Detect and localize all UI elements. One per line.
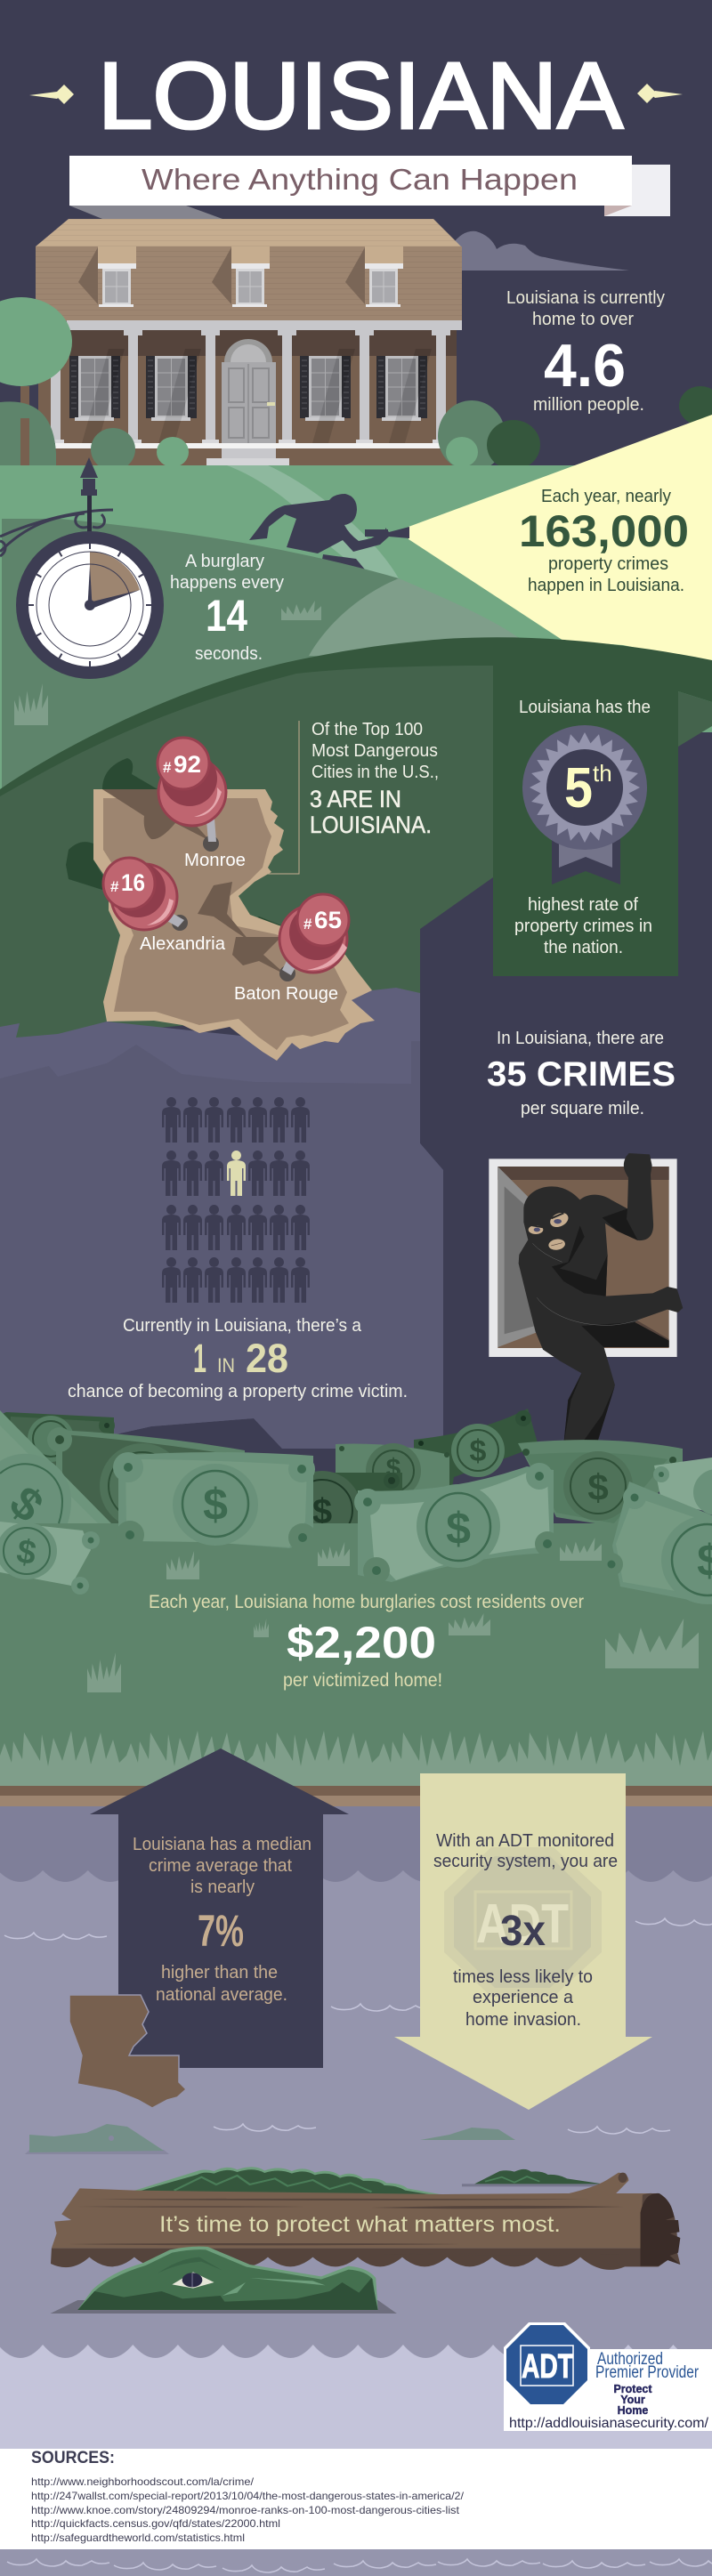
burglar climbing from window bbox=[489, 1153, 683, 1446]
stat: ADT 3x: 3x bbox=[500, 1908, 546, 1955]
alligator back on log bbox=[133, 2167, 443, 2195]
stat: cost of burglaries: Each year, Louisiana home burglaries cost residents over bbox=[149, 1592, 584, 1612]
money ground bbox=[0, 1523, 712, 1737]
left edge light stripe bbox=[0, 641, 2, 792]
icon: left title ornament bbox=[29, 85, 74, 104]
sources panel: http://safeguardtheworld.com/statistics.html bbox=[31, 2532, 245, 2544]
money: rotated left bill: $ bbox=[0, 1476, 53, 1532]
stat: crimes per square mile: In Louisiana, there are bbox=[497, 1029, 664, 1048]
map of Louisiana bbox=[93, 789, 375, 1061]
swamp water bbox=[0, 1806, 712, 2449]
faint background alligator hump bbox=[420, 2128, 515, 2140]
pin: Baton Rouge #65: # bbox=[303, 916, 312, 933]
people pictogram grid bbox=[162, 1097, 310, 1303]
subtitle ribbon bbox=[69, 156, 670, 219]
up arrow panel bbox=[90, 1748, 349, 2068]
down arrow panel bbox=[394, 1773, 652, 2110]
stat: 5th highest rate text: property crimes in bbox=[514, 917, 652, 936]
cloud bbox=[452, 231, 629, 271]
money: far right back bill: $ bbox=[470, 1434, 487, 1468]
log with alligators bbox=[51, 2167, 680, 2314]
city labels: Monroe bbox=[184, 851, 246, 870]
money: front right-center bill: $ bbox=[446, 1504, 471, 1554]
city labels bbox=[140, 851, 338, 1004]
stat: property crimes in beam: happen in Louisiana. bbox=[528, 576, 684, 595]
stat: property crimes in beam bbox=[519, 487, 689, 595]
stat: burglary frequency: A burglary bbox=[185, 552, 264, 571]
stat: property crimes in beam: Each year, nearly bbox=[541, 487, 671, 506]
stat: population: million people. bbox=[533, 395, 644, 415]
pin: Monroe #92: # bbox=[163, 759, 172, 776]
clock bbox=[16, 531, 164, 679]
stat: population: Louisiana is currently bbox=[506, 288, 665, 308]
stat: property crimes in beam: property crimes bbox=[548, 554, 668, 574]
stat: top 100 dangerous cities bbox=[310, 720, 439, 838]
medal: 5th bbox=[522, 725, 647, 884]
money: lower left bill bbox=[0, 1522, 100, 1595]
grass tuft bbox=[281, 601, 321, 620]
stat: 1 in 28: Currently in Louisiana, there’s a bbox=[123, 1316, 362, 1336]
stat: 5th highest rate text: highest rate of bbox=[528, 895, 638, 915]
grass tuft bbox=[14, 683, 48, 725]
medal: 5th: 5 bbox=[564, 755, 593, 820]
stat: cost of burglaries: $2,200 bbox=[287, 1618, 436, 1668]
bottom water strip bbox=[0, 2549, 712, 2576]
stat: ADT 3x: experience a bbox=[473, 1988, 574, 2007]
sources panel: http://247wallst.com/special-report/2013/10/04/the-most-dangerous-states-in-america/2/ bbox=[31, 2490, 465, 2502]
slogan on log: It’s time to protect what matters most. bbox=[159, 2212, 561, 2237]
stat: top 100 dangerous cities: Of the Top 100 bbox=[312, 720, 423, 739]
money: far right back bill bbox=[414, 1409, 538, 1530]
path highlight bbox=[227, 465, 400, 580]
stat: 1 in 28: IN bbox=[217, 1354, 235, 1377]
stat: median crime average: crime average that bbox=[149, 1856, 292, 1876]
stat: burglary frequency: 14 bbox=[206, 591, 247, 641]
stat: ADT 3x: security system, you are bbox=[433, 1852, 618, 1871]
right green sliver bbox=[678, 691, 712, 747]
stat: top 100 dangerous cities: LOUISIANA. bbox=[310, 812, 432, 838]
stat: median crime average: higher than the bbox=[161, 1963, 278, 1982]
title: LOUISIANA bbox=[98, 44, 623, 149]
faded ADT badge bbox=[444, 1847, 602, 1997]
stat: crimes per square mile: 35 CRIMES bbox=[487, 1055, 676, 1094]
stat: top 100 dangerous cities: 3 ARE IN bbox=[310, 786, 401, 812]
small alligator back bbox=[462, 2169, 603, 2186]
money: right mid bill bbox=[518, 1440, 683, 1528]
money: rotated left bill bbox=[0, 1410, 111, 1532]
stat: ADT 3x: times less likely to bbox=[453, 1967, 593, 1987]
flashlight beam bbox=[409, 415, 712, 663]
ADT authorized provider block: Home bbox=[618, 2404, 648, 2417]
money: front right-center bill bbox=[354, 1463, 560, 1584]
stat: 5th highest rate text bbox=[514, 698, 652, 957]
money: front center bill: $ bbox=[203, 1480, 228, 1530]
money: right mid bill: $ bbox=[587, 1466, 609, 1508]
stat: cost of burglaries: per victimized home! bbox=[283, 1670, 442, 1691]
stat: population: 4.6 bbox=[544, 332, 626, 400]
stat: crimes per square mile bbox=[487, 1029, 676, 1118]
tall grass band bbox=[0, 1729, 712, 1786]
pin: Baton Rouge #65 bbox=[279, 894, 349, 981]
pin: Baton Rouge #65: 65 bbox=[314, 907, 342, 933]
subtitle ribbon: Where Anything Can Happen bbox=[142, 163, 578, 196]
stat: population: home to over bbox=[532, 310, 634, 329]
ADT authorized provider block: Protect bbox=[613, 2383, 652, 2395]
stat: median crime average: 7% bbox=[198, 1906, 244, 1956]
sources panel: http://quickfacts.census.gov/qfd/states/22000.html bbox=[31, 2517, 280, 2530]
sources panel bbox=[0, 2449, 712, 2549]
stat: ADT 3x: home invasion. bbox=[465, 2010, 581, 2030]
money: back left bill bbox=[0, 1412, 115, 1530]
stat: 1 in 28 bbox=[68, 1316, 408, 1401]
stat: median crime average: national average. bbox=[156, 1985, 287, 2005]
stat: ADT 3x bbox=[433, 1831, 618, 2030]
map pin shadows on field bbox=[66, 758, 281, 925]
stat: property crimes in beam: 163,000 bbox=[519, 506, 689, 556]
purple mountain field bbox=[0, 988, 443, 1459]
stat: 1 in 28: 1 bbox=[193, 1336, 206, 1381]
stat: burglary frequency: seconds. bbox=[195, 644, 263, 664]
wave ripples bbox=[4, 1918, 712, 2134]
money: front right bill bbox=[600, 1482, 712, 1604]
pin: Monroe #92 bbox=[158, 738, 226, 852]
pin: Alexandria #16: # bbox=[110, 878, 119, 895]
money: dark middle bill: $ bbox=[312, 1492, 332, 1531]
stat: population bbox=[506, 288, 665, 415]
stat: 1 in 28: 28 bbox=[246, 1336, 288, 1381]
money: middle bill bbox=[336, 1443, 449, 1530]
stat: ADT 3x: With an ADT monitored bbox=[436, 1831, 614, 1851]
money: lower left bill: $ bbox=[14, 1532, 39, 1572]
house bbox=[36, 219, 462, 465]
hillside ground bbox=[0, 465, 712, 732]
money: dark bill bbox=[47, 1427, 245, 1530]
stat: burglary frequency: happens every bbox=[170, 573, 284, 593]
icon: burglar with flashlight silhouette bbox=[249, 494, 409, 569]
stat: crimes per square mile: per square mile. bbox=[521, 1099, 644, 1118]
sources panel: http://www.neighborhoodscout.com/la/crime/ bbox=[31, 2475, 255, 2488]
stat: burglary frequency bbox=[170, 552, 284, 664]
light hill patch bbox=[309, 578, 534, 663]
stat: median crime average bbox=[133, 1835, 312, 2005]
ADT authorized provider block: http://addlouisianasecurity.com/ bbox=[509, 2416, 709, 2431]
money: front center bill bbox=[113, 1452, 317, 1552]
stat: top 100 dangerous cities: Cities in the U.S., bbox=[312, 763, 439, 782]
faint background alligator bbox=[25, 2124, 169, 2154]
sources panel: http://www.knoe.com/story/24809294/monroe-ranks-on-100-most-dangerous-cities-list bbox=[31, 2504, 460, 2516]
pin: Alexandria #16 bbox=[103, 858, 188, 931]
dark green hill and stat panel bbox=[0, 637, 712, 976]
stat: 1 in 28: chance of becoming a property crime victim. bbox=[68, 1382, 408, 1401]
ADT authorized provider block: Authorized bbox=[597, 2350, 663, 2369]
grass tufts on money field bbox=[87, 1538, 699, 1692]
ADT authorized provider block: Your bbox=[620, 2394, 645, 2406]
lamp post and scroll arms bbox=[0, 457, 113, 556]
stat: median crime average: is nearly bbox=[190, 1877, 255, 1897]
ADT authorized provider block: ADT bbox=[522, 2348, 573, 2386]
medal: 5th: th bbox=[593, 760, 612, 787]
stat: top 100 dangerous cities: Most Dangerous bbox=[312, 741, 438, 761]
alligator head bbox=[51, 2247, 397, 2314]
mid green map field bbox=[0, 666, 493, 1041]
icon: right title ornament bbox=[637, 84, 683, 103]
stat: cost of burglaries bbox=[149, 1592, 584, 1691]
sources panel: SOURCES: bbox=[31, 2449, 115, 2467]
medium green hill bbox=[2, 519, 534, 801]
money: right top bill bbox=[653, 1458, 712, 1515]
city labels: Baton Rouge bbox=[234, 984, 338, 1004]
city labels: Alexandria bbox=[140, 934, 226, 954]
faded ADT badge: ADT bbox=[476, 1894, 569, 1955]
tree and shrubs bbox=[0, 297, 712, 472]
money: middle bill: $ bbox=[386, 1454, 401, 1483]
stat: 5th highest rate text: the nation. bbox=[544, 938, 623, 957]
fence rail bbox=[0, 1786, 712, 1806]
ADT authorized provider block bbox=[504, 2322, 712, 2431]
icon: small Louisiana map bbox=[69, 1995, 186, 2108]
stat: 5th highest rate text: Louisiana has the bbox=[519, 698, 651, 717]
pin: Alexandria #16: 16 bbox=[121, 869, 145, 896]
pin: Monroe #92: 92 bbox=[174, 751, 201, 778]
money: dark middle bill bbox=[283, 1471, 402, 1549]
stat: median crime average: Louisiana has a median bbox=[133, 1835, 312, 1854]
callout line bbox=[265, 721, 299, 874]
lower purple ridge bbox=[0, 1041, 443, 1459]
